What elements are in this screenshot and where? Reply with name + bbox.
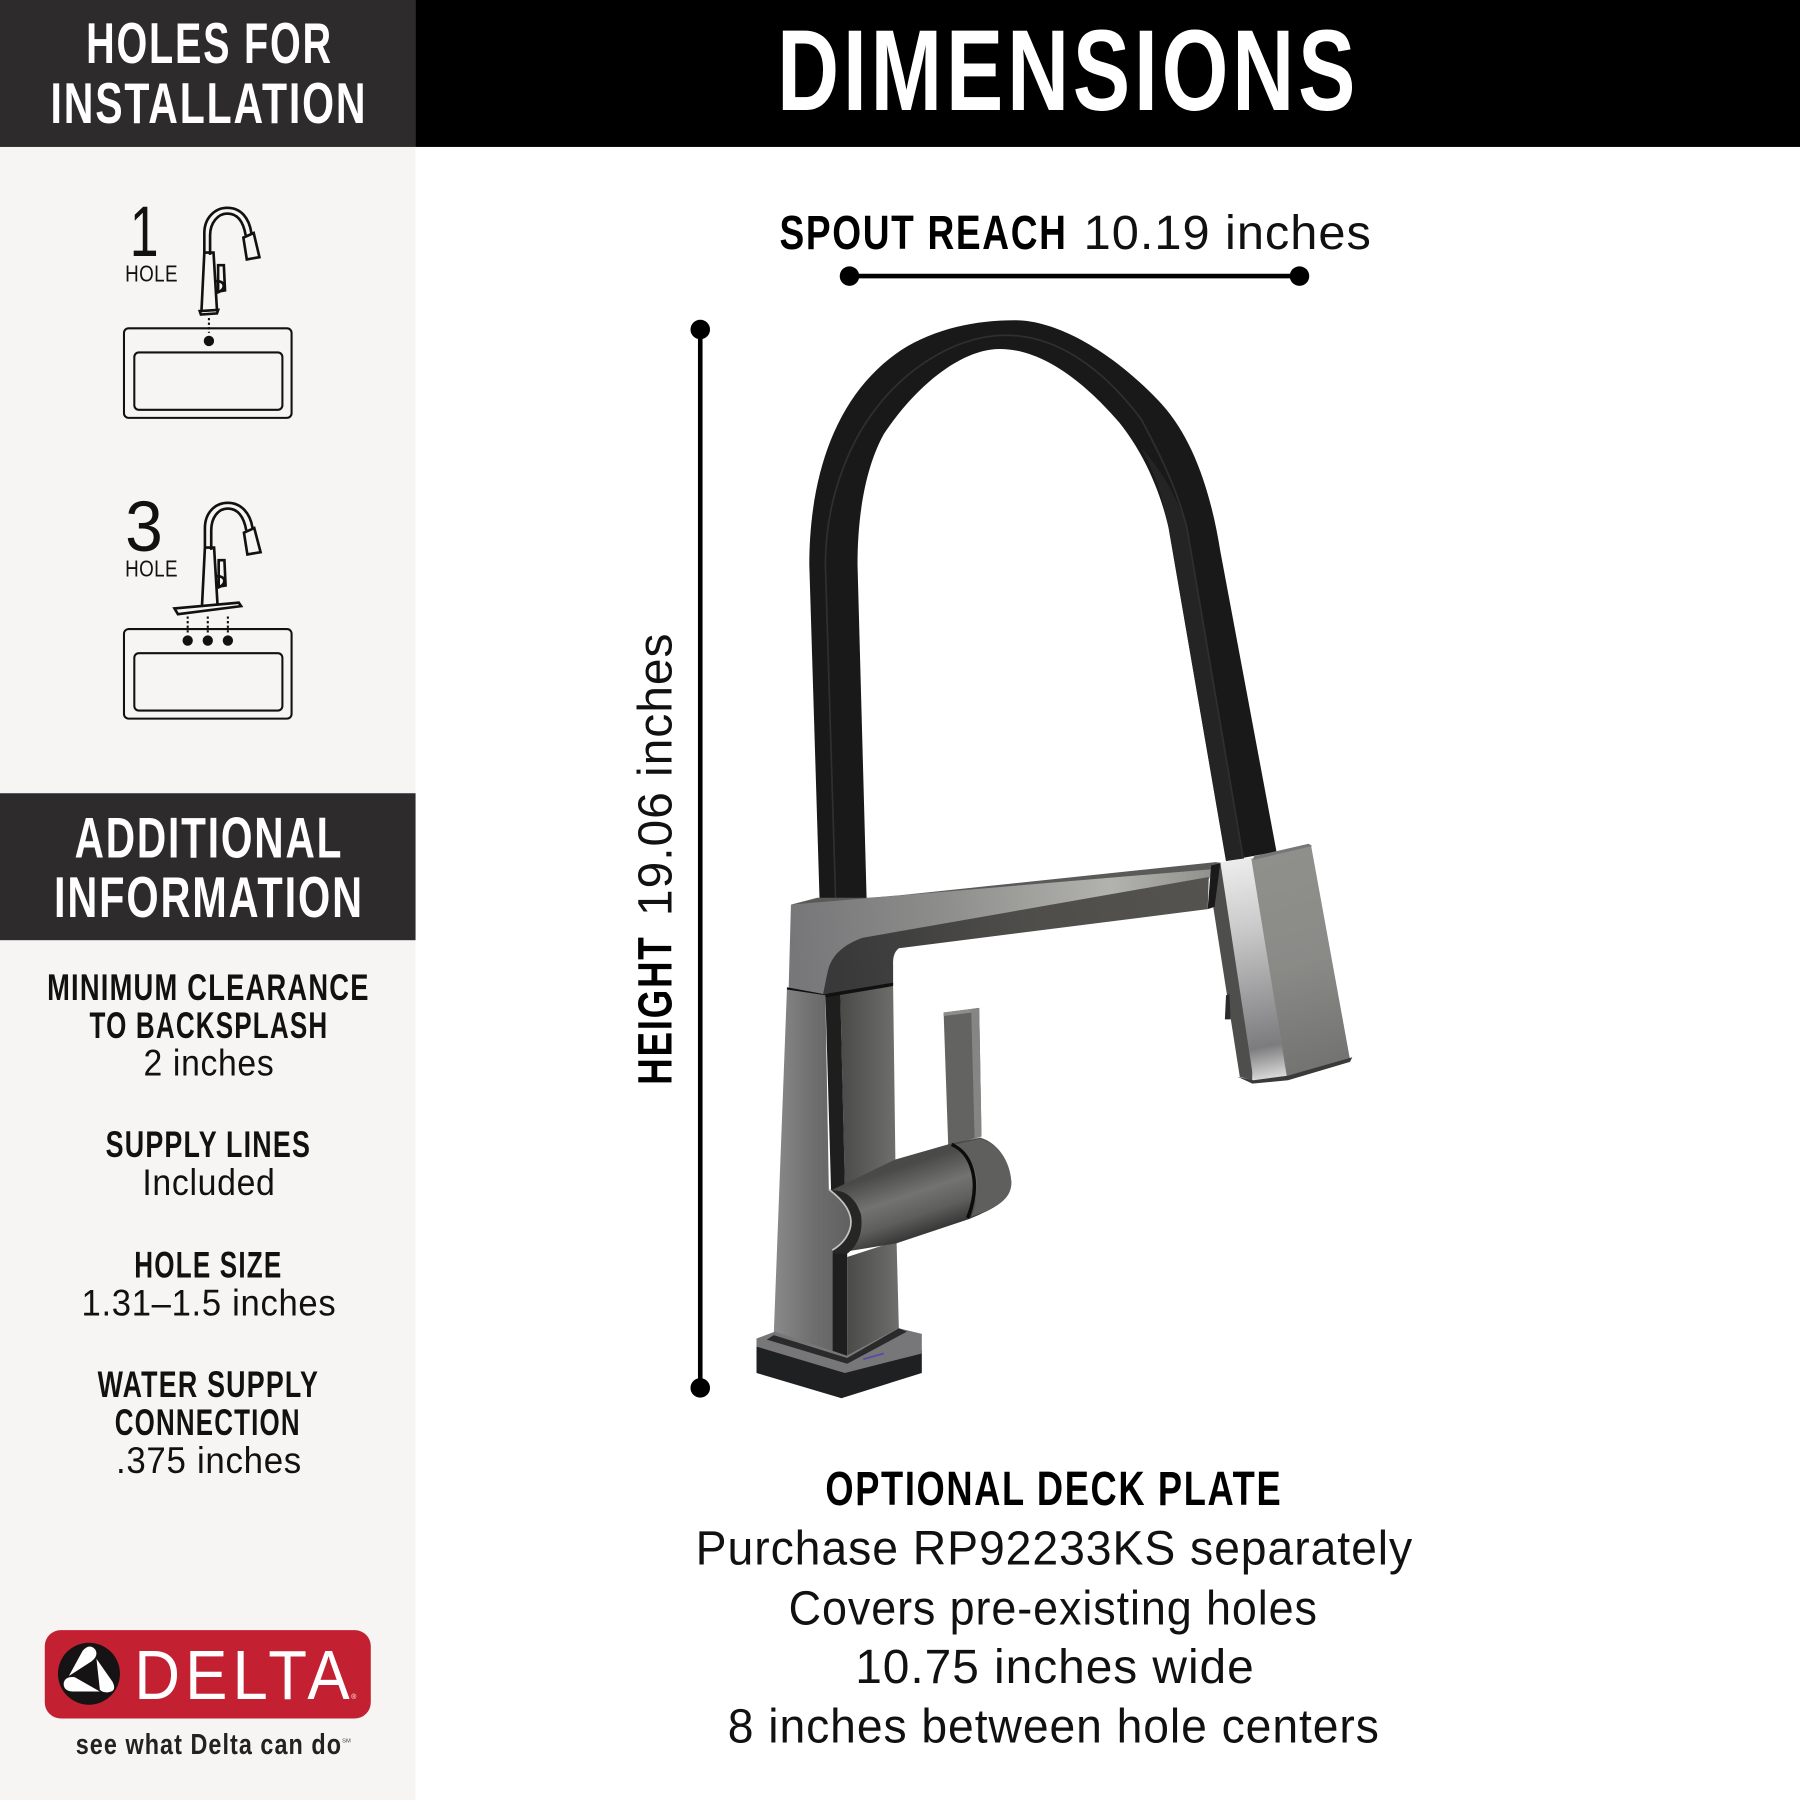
icon: one hole sink and faucet: HOLE: [125, 260, 178, 286]
header: holes for installation: HOLES FOR: [86, 12, 333, 76]
text block: optional deck plate: Covers pre-existing holes: [789, 1581, 1318, 1635]
dimension: spout reach: SPOUT REACH: [779, 206, 1068, 260]
text block: hole size: 1.31–1.5 inches: [82, 1283, 336, 1324]
text block: minimum clearance: 2 inches: [143, 1043, 274, 1084]
product: faucet illustration: [757, 320, 1352, 1398]
dimension: spout reach: [779, 206, 1372, 286]
faucet: arm underside: [823, 877, 1209, 994]
text block: optional deck plate: OPTIONAL DECK PLATE: [825, 1462, 1282, 1516]
faucet: seam: [787, 983, 893, 998]
panel: left sidebar background: [0, 0, 416, 1800]
header: additional information: INFORMATION: [54, 866, 364, 930]
dimension: height: [629, 320, 710, 1398]
header: additional information: ADDITIONAL: [75, 807, 343, 871]
faucet: handle lever: [944, 1008, 982, 1146]
text block: water supply connection: [98, 1364, 319, 1481]
icon: three hole sink and faucet with deck plate: 3: [125, 488, 164, 567]
icon: one hole sink and faucet: 1: [130, 193, 160, 272]
text block: optional deck plate: [696, 1462, 1413, 1754]
faucet: spray head: [1208, 844, 1352, 1084]
faucet: arm top surface: [791, 862, 1224, 909]
text block: supply lines: [106, 1124, 311, 1203]
header: dimensions title: [416, 0, 1800, 147]
faucet: left face highlight: [829, 1189, 851, 1250]
logo: Delta: ®: [351, 1693, 356, 1701]
faucet: column left face: [774, 990, 851, 1352]
text block: water supply connection: .375 inches: [116, 1440, 302, 1481]
text block: minimum clearance: [47, 967, 370, 1084]
dimension: height: 19.06 inches: [629, 633, 683, 916]
faucet: base plate: [757, 1328, 922, 1398]
text block: hole size: [82, 1245, 336, 1324]
faucet: handle cylinder: [831, 1138, 1011, 1254]
header: holes for installation: INSTALLATION: [51, 72, 367, 136]
text block: optional deck plate: Purchase RP92233KS separately: [696, 1522, 1413, 1576]
faucet: dark channel upper: [825, 993, 845, 1192]
header: dimensions title: DIMENSIONS: [777, 7, 1359, 135]
faucet: arm light face: [789, 869, 1215, 994]
text block: minimum clearance: TO BACKSPLASH: [90, 1005, 328, 1046]
text block: water supply connection: WATER SUPPLY: [98, 1364, 319, 1405]
faucet: column right face: [840, 986, 895, 1187]
dimension: spout reach: 10.19 inches: [1084, 206, 1372, 260]
text block: water supply connection: CONNECTION: [115, 1402, 301, 1443]
dimension: height: HEIGHT: [629, 936, 683, 1085]
faucet: column lower right face: [847, 1241, 899, 1356]
text block: supply lines: SUPPLY LINES: [106, 1124, 311, 1165]
faucet: dark channel lower: [832, 1250, 847, 1358]
text block: optional deck plate: 10.75 inches wide: [855, 1640, 1255, 1694]
logo: Delta: SM: [342, 1739, 351, 1745]
logo: Delta: [45, 1630, 371, 1761]
text block: hole size: HOLE SIZE: [134, 1245, 282, 1286]
faucet: black hose: [809, 320, 1277, 902]
text block: optional deck plate: 8 inches between hole centers: [728, 1700, 1380, 1754]
icon: one hole sink and faucet: [124, 193, 292, 418]
text block: supply lines: Included: [142, 1162, 276, 1203]
header: holes for installation: [0, 0, 416, 147]
logo: Delta: DELTA: [134, 1636, 355, 1714]
header: additional information: [0, 793, 416, 940]
logo: Delta: see what Delta can do: [76, 1729, 342, 1761]
text block: minimum clearance: MINIMUM CLEARANCE: [47, 967, 370, 1008]
icon: three hole sink and faucet with deck plate: [124, 488, 292, 719]
icon: three hole sink and faucet with deck plate: HOLE: [125, 555, 178, 581]
